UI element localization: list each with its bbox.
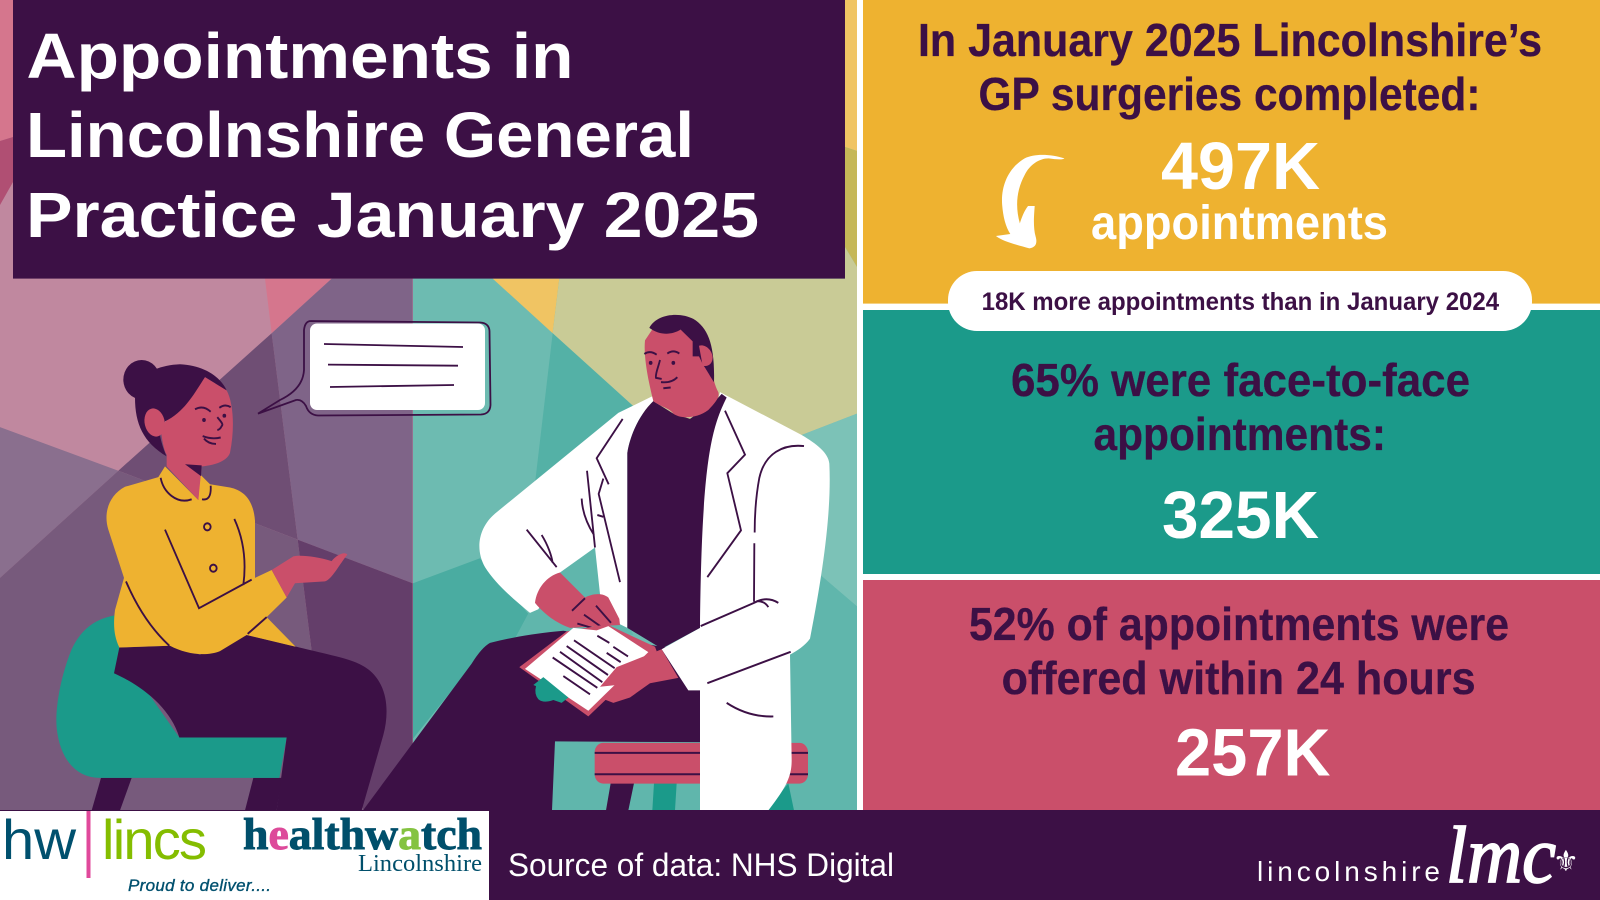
- logo: Lincolnshire LMC: lmc: [1446, 812, 1556, 900]
- panel: within 24 hours appointments: 257K: [1175, 716, 1330, 791]
- logo: hw lincs and Healthwatch Lincolnshire: Proud to deliver....: [128, 876, 271, 895]
- panel: total appointments: GP surgeries completed:: [978, 68, 1480, 120]
- panel: total appointments: In January 2025 Lincolnshire’s: [918, 14, 1542, 66]
- panel: face-to-face appointments: 65% were face-to-face: [1011, 354, 1470, 406]
- title box: [13, 0, 845, 279]
- logo: hw lincs and Healthwatch Lincolnshire: Lincolnshire: [358, 850, 482, 877]
- logo: hw lincs and Healthwatch Lincolnshire: lincs: [102, 808, 207, 871]
- icon: speech bubble: [258, 321, 490, 416]
- icon: curved arrow: [996, 155, 1064, 248]
- panel: within 24 hours appointments: offered within 24 hours: [1002, 652, 1476, 704]
- panel: total appointments: [863, 0, 1600, 304]
- logo: Lincolnshire LMC: [1257, 812, 1579, 900]
- logo: Lincolnshire LMC: ⚜: [1553, 844, 1579, 878]
- callout: year on year comparison pill: [948, 271, 1532, 331]
- panel: total appointments: appointments: [1091, 197, 1388, 250]
- panel: face-to-face appointments: [863, 310, 1600, 574]
- title box: Appointments in: [26, 20, 574, 92]
- panel: face-to-face appointments: appointments:: [1094, 408, 1386, 460]
- logo: Lincolnshire LMC: lincolnshire: [1257, 856, 1440, 887]
- source note: Source of data: NHS Digital: [508, 847, 894, 883]
- panel: illustration background: [0, 0, 857, 811]
- logo: hw lincs and Healthwatch Lincolnshire: hw: [2, 808, 77, 871]
- callout: year on year comparison pill: 18K more appointments than in January 2024: [982, 288, 1499, 316]
- footer bar: [0, 810, 1600, 900]
- illustration: doctor in white coat with clipboard: [363, 315, 830, 810]
- title box: Practice January 2025: [26, 179, 759, 251]
- panel: total appointments: 497K: [1161, 129, 1320, 204]
- logo: hw lincs and Healthwatch Lincolnshire: healthwatch: [243, 810, 482, 859]
- illustration: seated woman on teal chair: [56, 360, 387, 810]
- panel: within 24 hours appointments: [863, 580, 1600, 810]
- panel: face-to-face appointments: 325K: [1162, 478, 1319, 553]
- logo: hw lincs and Healthwatch Lincolnshire: [0, 808, 489, 900]
- panel: within 24 hours appointments: 52% of appointments were: [969, 598, 1509, 650]
- title box: Lincolnshire General: [26, 99, 694, 171]
